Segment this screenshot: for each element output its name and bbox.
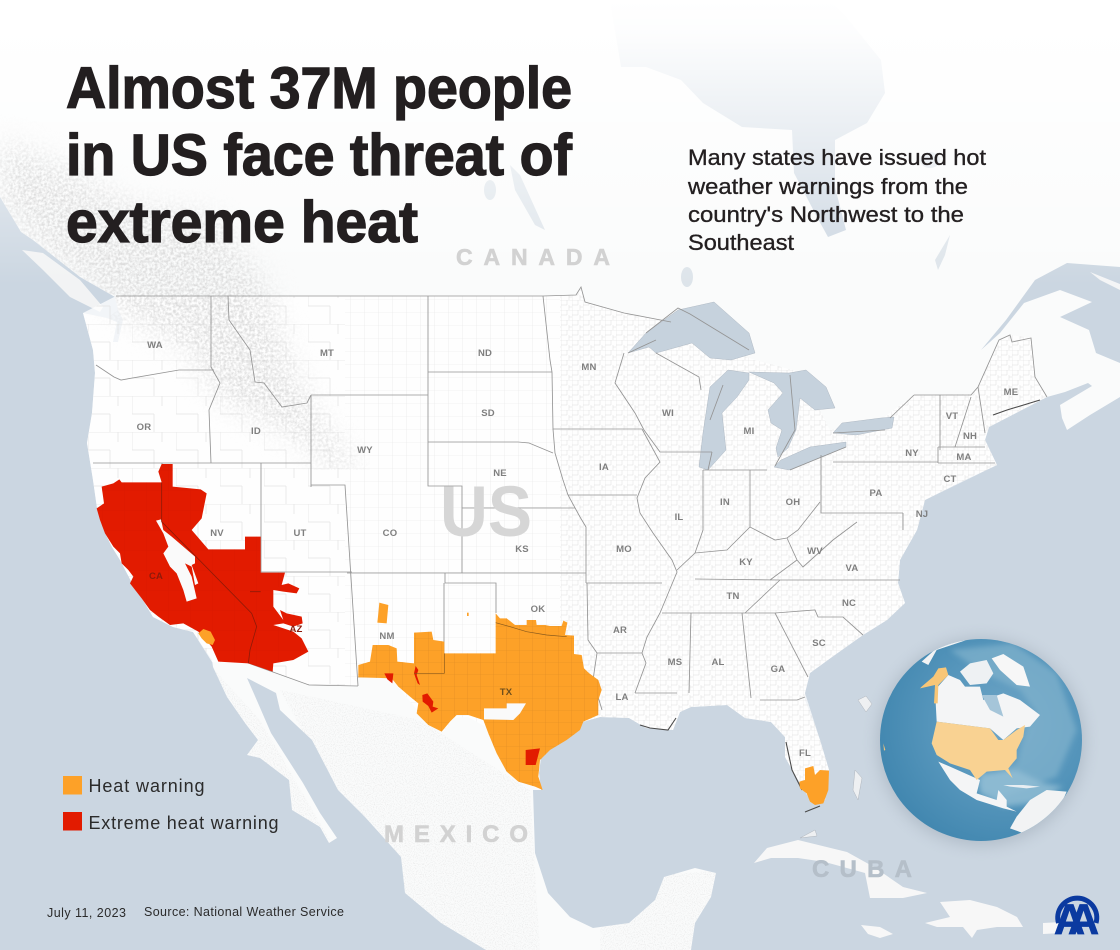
date and source [47,905,344,920]
subtitle [687,145,986,255]
siberia edge [922,640,967,665]
state labels: MO [616,544,632,555]
hawaii [883,743,885,751]
cuba [754,840,927,898]
top fade [0,0,1120,285]
red river and state line [414,623,567,673]
subtitle: Many states have issued hot [688,145,986,170]
state labels: NY [905,448,919,459]
hudson bay [610,0,885,237]
jamaica and puerto rico [861,922,1062,938]
legend [63,776,278,833]
state labels: GA [771,664,785,675]
country labels: US [440,473,532,552]
state labels: SC [812,638,826,649]
state labels: NJ [916,509,928,520]
southern california heat warning [198,629,215,645]
state labels: MI [744,426,754,437]
state labels: CO [383,528,397,539]
state labels: LA [615,692,629,703]
state labels: ME [1004,387,1018,398]
title: in US face threat of [66,123,573,188]
globe sphere [880,639,1082,841]
globe inset [878,639,1084,845]
state labels: AR [613,625,627,636]
land texture [210,665,720,950]
hispaniola [925,900,1023,938]
inner state borders [162,482,261,663]
coastline details [640,400,1040,812]
state labels: NE [493,468,507,479]
uncoloured central texas counties [484,703,526,720]
caribbean islands [1003,785,1040,788]
state labels: MN [581,362,597,373]
great lakes [628,302,894,470]
state labels: PA [870,488,882,499]
state labels: NV [210,528,224,539]
north america [935,675,1040,740]
canadian lakes [484,152,950,287]
state labels: ID [251,426,261,437]
pacific ocean [0,197,486,950]
subtitle: weather warnings from the [687,174,968,199]
warning areas [97,464,829,805]
heat warning: texas and new mexico [358,603,602,790]
state labels: WY [357,445,373,456]
state labels: AL [711,657,725,668]
country labels: CUBA [812,856,912,883]
state labels: VA [846,563,858,574]
title [66,56,573,255]
country labels: MEXICO [384,821,528,848]
state labels: CT [943,474,957,485]
state labels: OK [531,604,545,615]
anticosti island [1090,272,1120,290]
vancouver island [22,250,103,312]
county lines in orange area [358,613,602,790]
state labels: IA [599,462,609,473]
subtitle: Southeast [688,230,794,255]
county lines in red area [97,464,308,672]
state labels: ND [478,348,492,359]
uncoloured sierra corridor [156,519,198,602]
eastern new mexico patch [377,603,388,623]
gulf of st lawrence [981,263,1120,363]
state labels: NH [963,431,977,442]
arctic archipelago [960,660,993,685]
south america [1010,790,1067,833]
state labels: SD [481,408,495,419]
extreme heat warning: california, nevada, arizona [97,464,308,672]
subtitle: country's Northwest to the [688,202,964,227]
state labels: TN [726,591,740,602]
greenland [992,654,1030,687]
logo: AA [1054,896,1099,944]
tiny county [467,613,469,616]
gulf of mexico and atlantic [533,383,1120,950]
alaska [920,667,948,703]
state labels: MA [956,452,972,463]
state labels: NC [842,598,856,609]
state labels: AZ [289,624,303,635]
extreme heat pockets in texas [384,666,540,765]
shelf seas [950,643,1077,807]
title: Almost 37M people [66,56,572,121]
state labels: WI [662,408,674,419]
state labels: CA [149,571,163,582]
state labels: IN [720,497,730,508]
country labels: CANADA [456,244,610,270]
state labels: TX [500,687,513,698]
united states [932,722,1025,780]
state labels: IL [675,512,683,523]
hudson bay [982,695,1003,717]
state labels: UT [293,528,307,539]
state labels: MT [320,348,334,359]
state labels: KS [515,544,529,555]
date and source: Source: National Weather Service [144,905,344,919]
state labels: WV [807,546,823,557]
state labels: MS [668,657,682,668]
state labels: WA [147,340,163,351]
mexico and central america [938,762,1017,812]
date and source: July 11, 2023 [47,906,126,920]
heat warning: south florida [799,766,829,805]
state labels: FL [799,748,811,759]
state labels: OR [137,422,151,433]
extreme heat warning swatch: Extreme heat warning [88,813,278,833]
heat warning swatch: Heat warning [88,776,204,796]
state borders [93,287,1047,710]
mountains [0,140,360,480]
title: extreme heat [66,190,418,255]
bahamas [800,696,915,838]
county grid [80,280,1060,820]
state labels: NM [379,631,395,642]
state labels: OH [786,497,800,508]
globe shadow [878,639,1084,845]
state labels [137,340,1018,759]
state labels: VT [946,411,958,422]
country labels [384,244,912,883]
state labels: KY [739,557,753,568]
